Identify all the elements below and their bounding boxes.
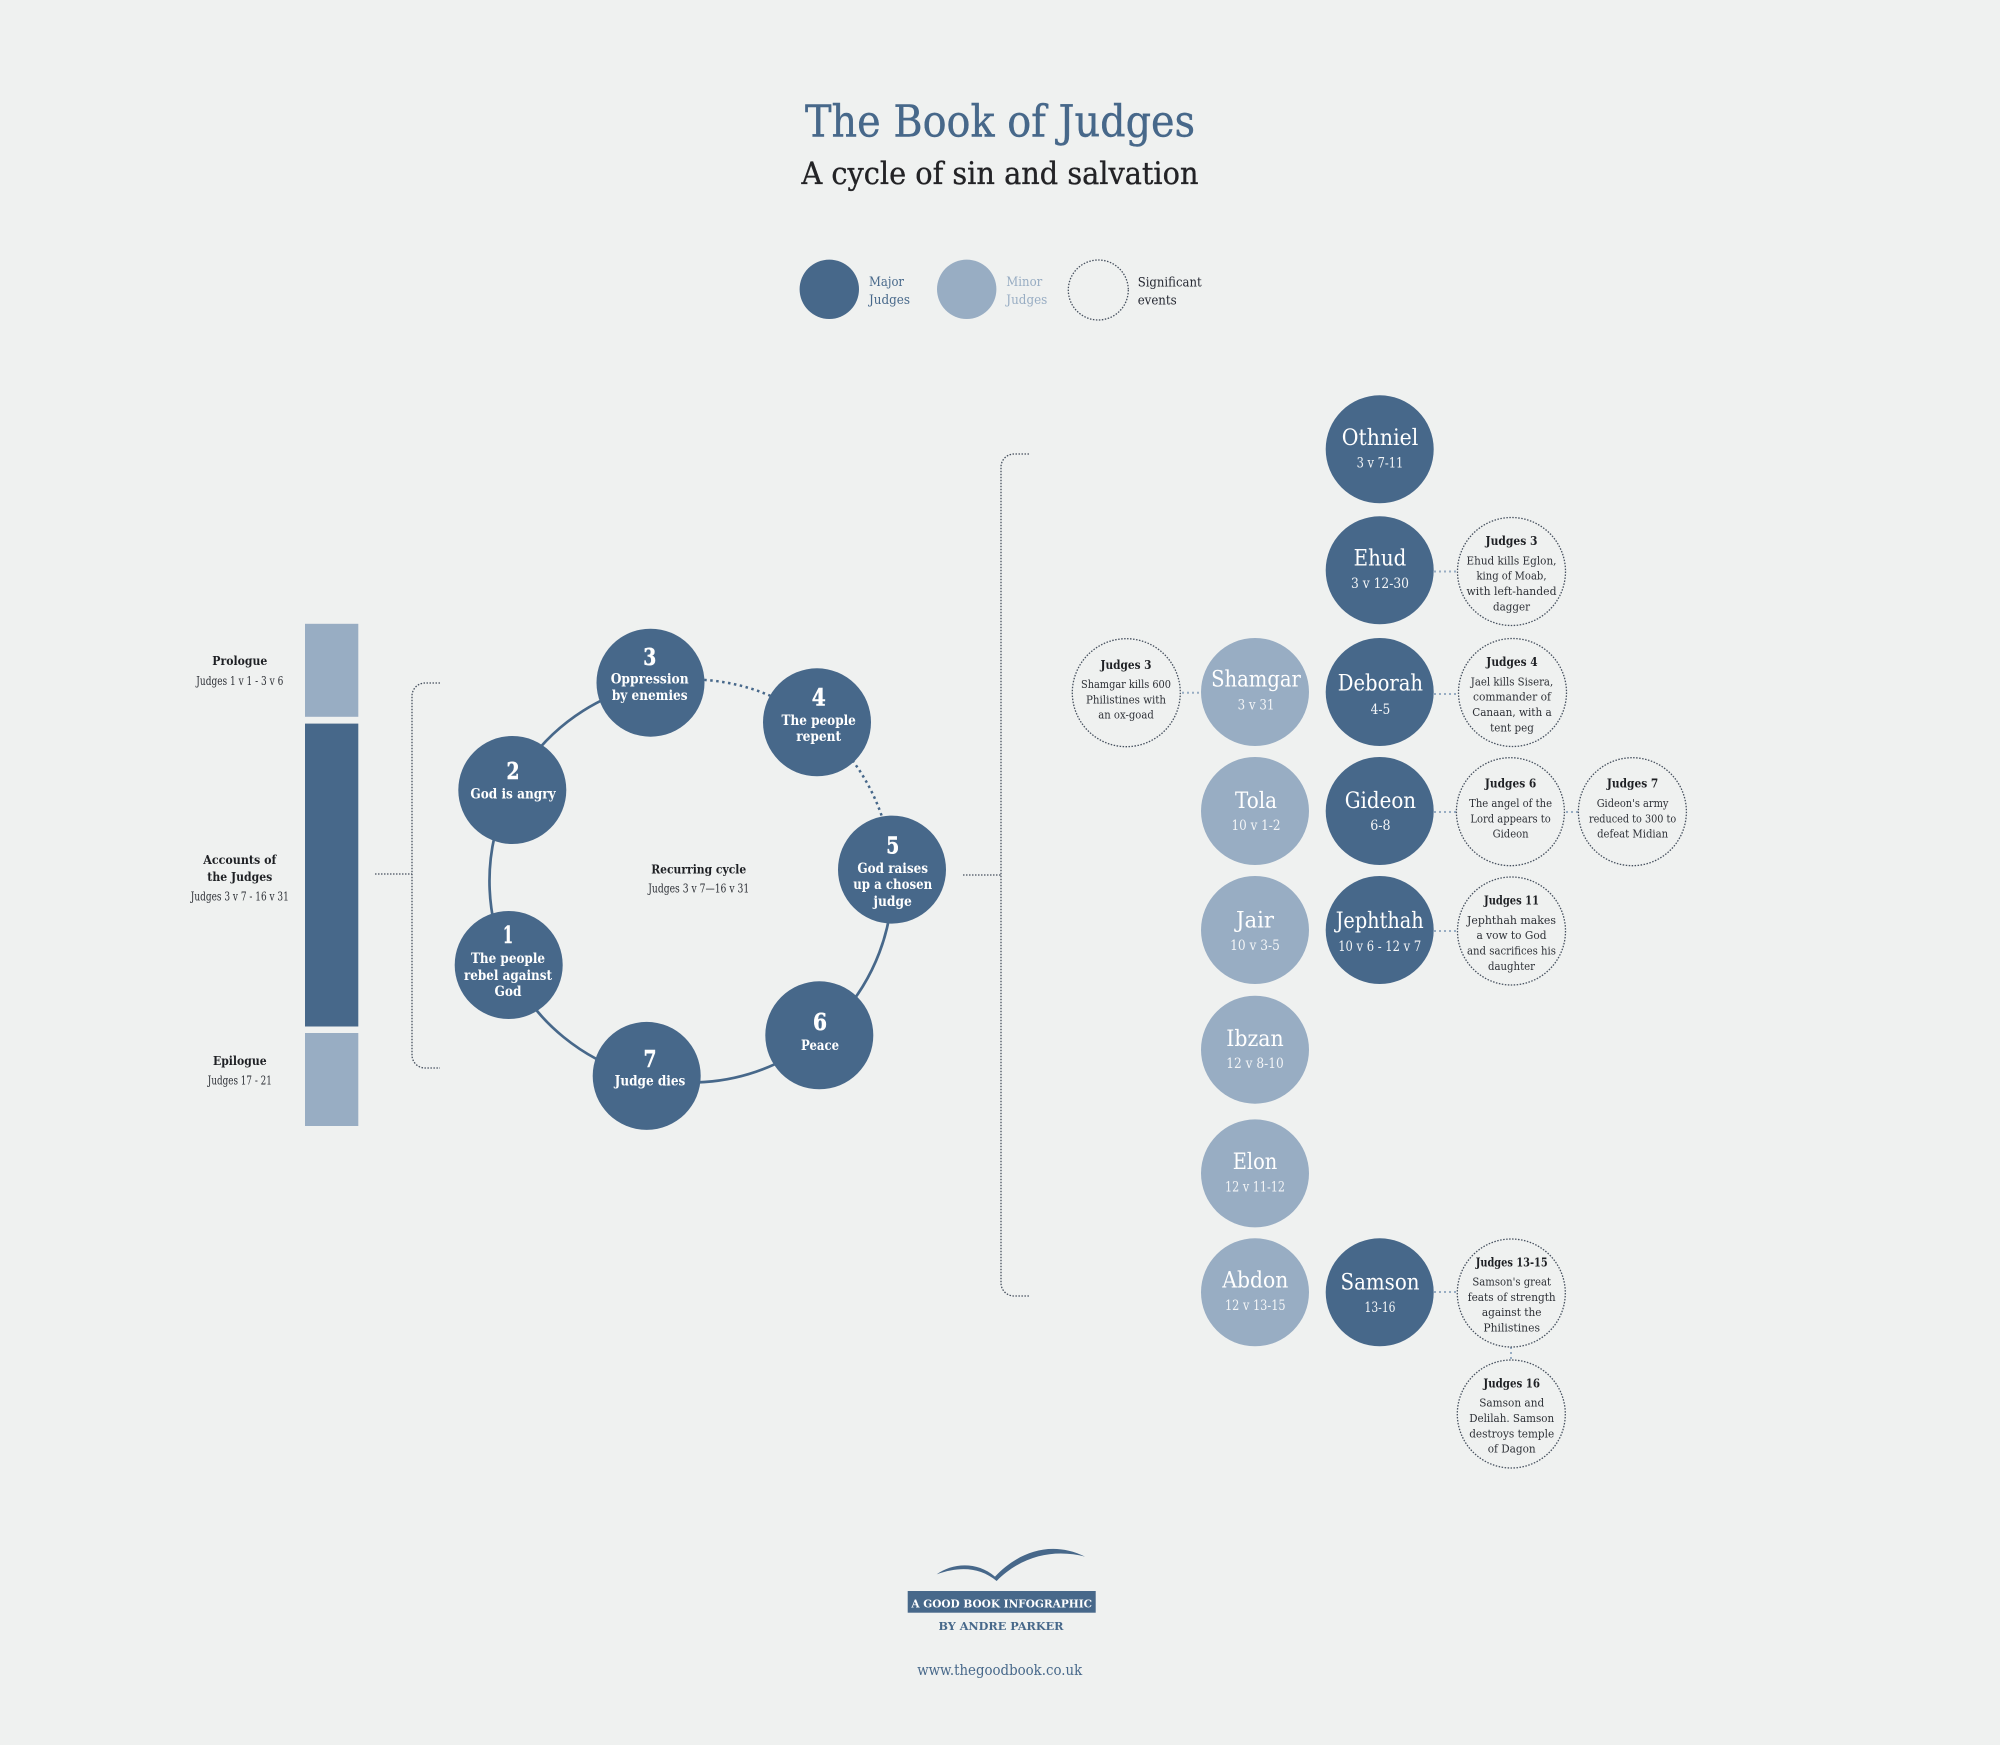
event: Judges 3 Shamgar: Shamgar kills 600 (1081, 677, 1171, 691)
legend: major judges: Judges (867, 293, 910, 308)
bar: epilogue (305, 1033, 358, 1126)
judge: Gideon: 6-8 (1370, 818, 1391, 834)
event: Judges 3 Shamgar: Judges 3 (1100, 657, 1152, 672)
step 3: by enemies (612, 688, 688, 704)
step 7: Judge dies (614, 1074, 686, 1090)
judge: Jephthah: Jephthah (1334, 909, 1424, 934)
judge: Deborah: 4-5 (1371, 702, 1390, 718)
step 4: The people (782, 713, 856, 729)
legend (800, 260, 1202, 320)
judge: Shamgar: 3 v 31 (1238, 698, 1274, 714)
logo banner (908, 1591, 1096, 1613)
event: Judges 3 Ehud: king of Moab, (1476, 569, 1546, 583)
judge: Jephthah: 10 v 6 - 12 v 7 (1338, 939, 1421, 955)
legend: minor judges: Judges (1004, 293, 1047, 308)
event: Judges 13-15: Judges 13-15 (1475, 1254, 1548, 1269)
event: Judges 13-15: feats of strength (1468, 1290, 1556, 1304)
judge: Ibzan (1201, 996, 1309, 1104)
step 5: God raises (857, 861, 928, 877)
cycle centre label: Recurring cycle (651, 862, 746, 877)
judge: Samson (1326, 1238, 1434, 1346)
step 2: 2 (506, 758, 520, 785)
cycle ring: dotted arc (650, 679, 892, 881)
legend: significant events (1068, 260, 1202, 320)
event: Judges 7: Judges 7 (1606, 776, 1658, 791)
logo banner: A GOOD BOOK INFOGRAPHIC (910, 1596, 1092, 1610)
event: Judges 6 (1456, 758, 1564, 866)
label: accounts: Judges 3 v 7 - 16 v 31 (189, 890, 289, 904)
bracket: cycle to judges (963, 454, 1029, 1296)
judge: Tola: 10 v 1-2 (1232, 818, 1280, 834)
legend: major judges: Major (869, 275, 905, 290)
judge: Tola (1201, 757, 1309, 865)
judge: Abdon: 12 v 13-15 (1225, 1298, 1286, 1314)
judge: Elon (1201, 1119, 1309, 1227)
byline: BY ANDRE PARKER (938, 1619, 1064, 1633)
event: Judges 11: Judges 11 (1483, 892, 1539, 908)
event: Judges 4: Judges 4 (1485, 654, 1538, 669)
event: Judges 13-15: against the (1482, 1305, 1542, 1319)
judge: Samson: 13-16 (1364, 1300, 1396, 1316)
label: accounts: the Judges (207, 869, 272, 884)
judge: Othniel: 3 v 7-11 (1357, 456, 1403, 472)
judge: Ehud (1326, 516, 1434, 624)
step 4: repent (796, 729, 842, 745)
event: Judges 4: tent peg (1490, 720, 1534, 734)
event: Judges 16: destroys temple (1469, 1426, 1554, 1440)
judge: Shamgar: Shamgar (1211, 668, 1301, 692)
step 3 (596, 629, 704, 737)
event: Judges 3 Ehud: dagger (1493, 599, 1530, 613)
label: prologue (195, 653, 283, 688)
judge: Deborah: Deborah (1338, 672, 1423, 696)
event: Judges 3 Ehud: Judges 3 (1485, 533, 1538, 548)
judge: Tola: Tola (1235, 789, 1277, 814)
judge: Elon: Elon (1233, 1150, 1277, 1175)
judge: Samson: Samson (1340, 1270, 1420, 1296)
judge: Jephthah (1326, 876, 1434, 984)
legend: minor judges (937, 260, 1047, 319)
panel: judges (1072, 395, 1686, 1468)
event: Judges 7: Gideon's army (1597, 796, 1669, 810)
step 1: The people (471, 951, 545, 967)
event: Judges 13-15 (1457, 1239, 1565, 1347)
step 5: up a chosen (853, 877, 932, 893)
judge: Deborah (1326, 638, 1434, 746)
judge: Ibzan: 12 v 8-10 (1226, 1056, 1284, 1072)
event: Judges 7: defeat Midian (1597, 827, 1669, 841)
label: accounts (189, 852, 289, 904)
event: Judges 3 Shamgar (1072, 639, 1180, 747)
step 3: Oppression (611, 672, 689, 688)
bracket: accounts to cycle (375, 683, 440, 1068)
event: Judges 4 (1458, 638, 1566, 746)
step 6 (765, 981, 873, 1089)
event: Judges 4: Jael kills Sisera, (1470, 674, 1553, 688)
step 3: 3 (643, 644, 656, 671)
event: Judges 11 (1458, 877, 1566, 985)
step 2 (458, 736, 566, 844)
event: Judges 7 (1578, 758, 1686, 866)
footer logo (908, 1549, 1096, 1679)
judge: Ehud: 3 v 12-30 (1351, 576, 1409, 592)
event: Judges 3 Ehud: with left-handed (1466, 584, 1557, 598)
panel: recurring cycle (455, 629, 946, 1130)
label: epilogue (206, 1053, 272, 1088)
step 1 (455, 911, 563, 1019)
judge: Gideon (1326, 757, 1434, 865)
judge: Gideon: Gideon (1345, 789, 1416, 814)
title: The Book of Judges (805, 97, 1195, 148)
event: Judges 6: The angel of the (1469, 796, 1552, 810)
step 2: God is angry (470, 786, 557, 802)
bar: accounts of the judges (305, 724, 358, 1026)
step 6: Peace (801, 1038, 839, 1054)
event: Judges 11: daughter (1488, 959, 1535, 973)
label: epilogue: Epilogue (213, 1053, 267, 1068)
judge: Shamgar (1201, 638, 1309, 746)
legend: major judges (800, 260, 910, 319)
step 1: God (494, 984, 522, 1000)
judge: Ibzan: Ibzan (1226, 1027, 1284, 1052)
event: Judges 11: a vow to God (1476, 928, 1547, 942)
event: Judges 13-15: Samson's great (1472, 1275, 1551, 1289)
icon: open book bird (937, 1549, 1085, 1581)
step 5: 5 (886, 832, 899, 859)
judge: Jair: Jair (1234, 908, 1274, 934)
cycle centre label: Judges 3 v 7—16 v 31 (647, 882, 749, 896)
event: Judges 7: reduced to 300 to (1589, 811, 1676, 825)
event: Judges 6: Lord appears to (1470, 811, 1551, 825)
label: prologue: Judges 1 v 1 - 3 v 6 (195, 674, 283, 688)
step 1: 1 (503, 922, 513, 949)
step 4 (763, 668, 871, 776)
event: Judges 16: Samson and (1479, 1396, 1545, 1410)
event: Judges 3 Shamgar: Philistines with (1086, 692, 1167, 706)
judge: Abdon: Abdon (1221, 1268, 1288, 1294)
event: Judges 3 Ehud: Ehud kills Eglon, (1466, 553, 1556, 567)
event: Judges 11: and sacrifices his (1467, 944, 1556, 958)
judge: Othniel (1326, 395, 1434, 503)
label: accounts: Accounts of (202, 852, 278, 867)
event: Judges 13-15: Philistines (1483, 1321, 1540, 1335)
judge: Elon: 12 v 11-12 (1225, 1180, 1285, 1196)
cycle ring: solid arc (490, 684, 892, 1082)
judge: Jair: 10 v 3-5 (1230, 938, 1280, 954)
event: Judges 11: Jephthah makes (1466, 913, 1556, 927)
event: Judges 16 (1457, 1360, 1565, 1468)
event: Judges 3 Shamgar: an ox-goad (1098, 708, 1154, 722)
website: www.thegoodbook.co.uk (917, 1661, 1083, 1679)
label: epilogue: Judges 17 - 21 (206, 1074, 272, 1088)
event: Judges 16: Delilah. Samson (1469, 1411, 1555, 1425)
step 5 (838, 816, 946, 924)
step 5: judge (873, 894, 912, 910)
step 1: rebel against (464, 968, 553, 984)
subtitle: A cycle of sin and salvation (801, 156, 1199, 192)
event: Judges 6: Gideon (1493, 827, 1529, 841)
event: Judges 3 Ehud (1458, 518, 1566, 626)
judge: Abdon (1201, 1238, 1309, 1346)
event: Judges 16: of Dagon (1488, 1442, 1536, 1456)
step 6: 6 (813, 1009, 827, 1036)
label: prologue: Prologue (212, 653, 267, 668)
event: Judges 6: Judges 6 (1484, 776, 1537, 791)
legend: significant events: Significant (1138, 276, 1202, 291)
judge: Jair (1201, 876, 1309, 984)
judge: Othniel: Othniel (1342, 426, 1418, 451)
step 7: 7 (644, 1046, 656, 1073)
bar: prologue (305, 624, 358, 717)
cycle centre label (647, 862, 749, 896)
step 7 (593, 1022, 701, 1130)
event: Judges 4: Canaan, with a (1472, 705, 1552, 719)
connectors (1182, 572, 1578, 1360)
step 4: 4 (812, 685, 826, 712)
panel: book structure bar (189, 624, 358, 1126)
legend: significant events: events (1138, 294, 1177, 309)
legend: minor judges: Minor (1006, 275, 1043, 290)
judge: Ehud: Ehud (1354, 546, 1406, 572)
event: Judges 16: Judges 16 (1483, 1375, 1540, 1390)
event: Judges 4: commander of (1473, 690, 1552, 704)
